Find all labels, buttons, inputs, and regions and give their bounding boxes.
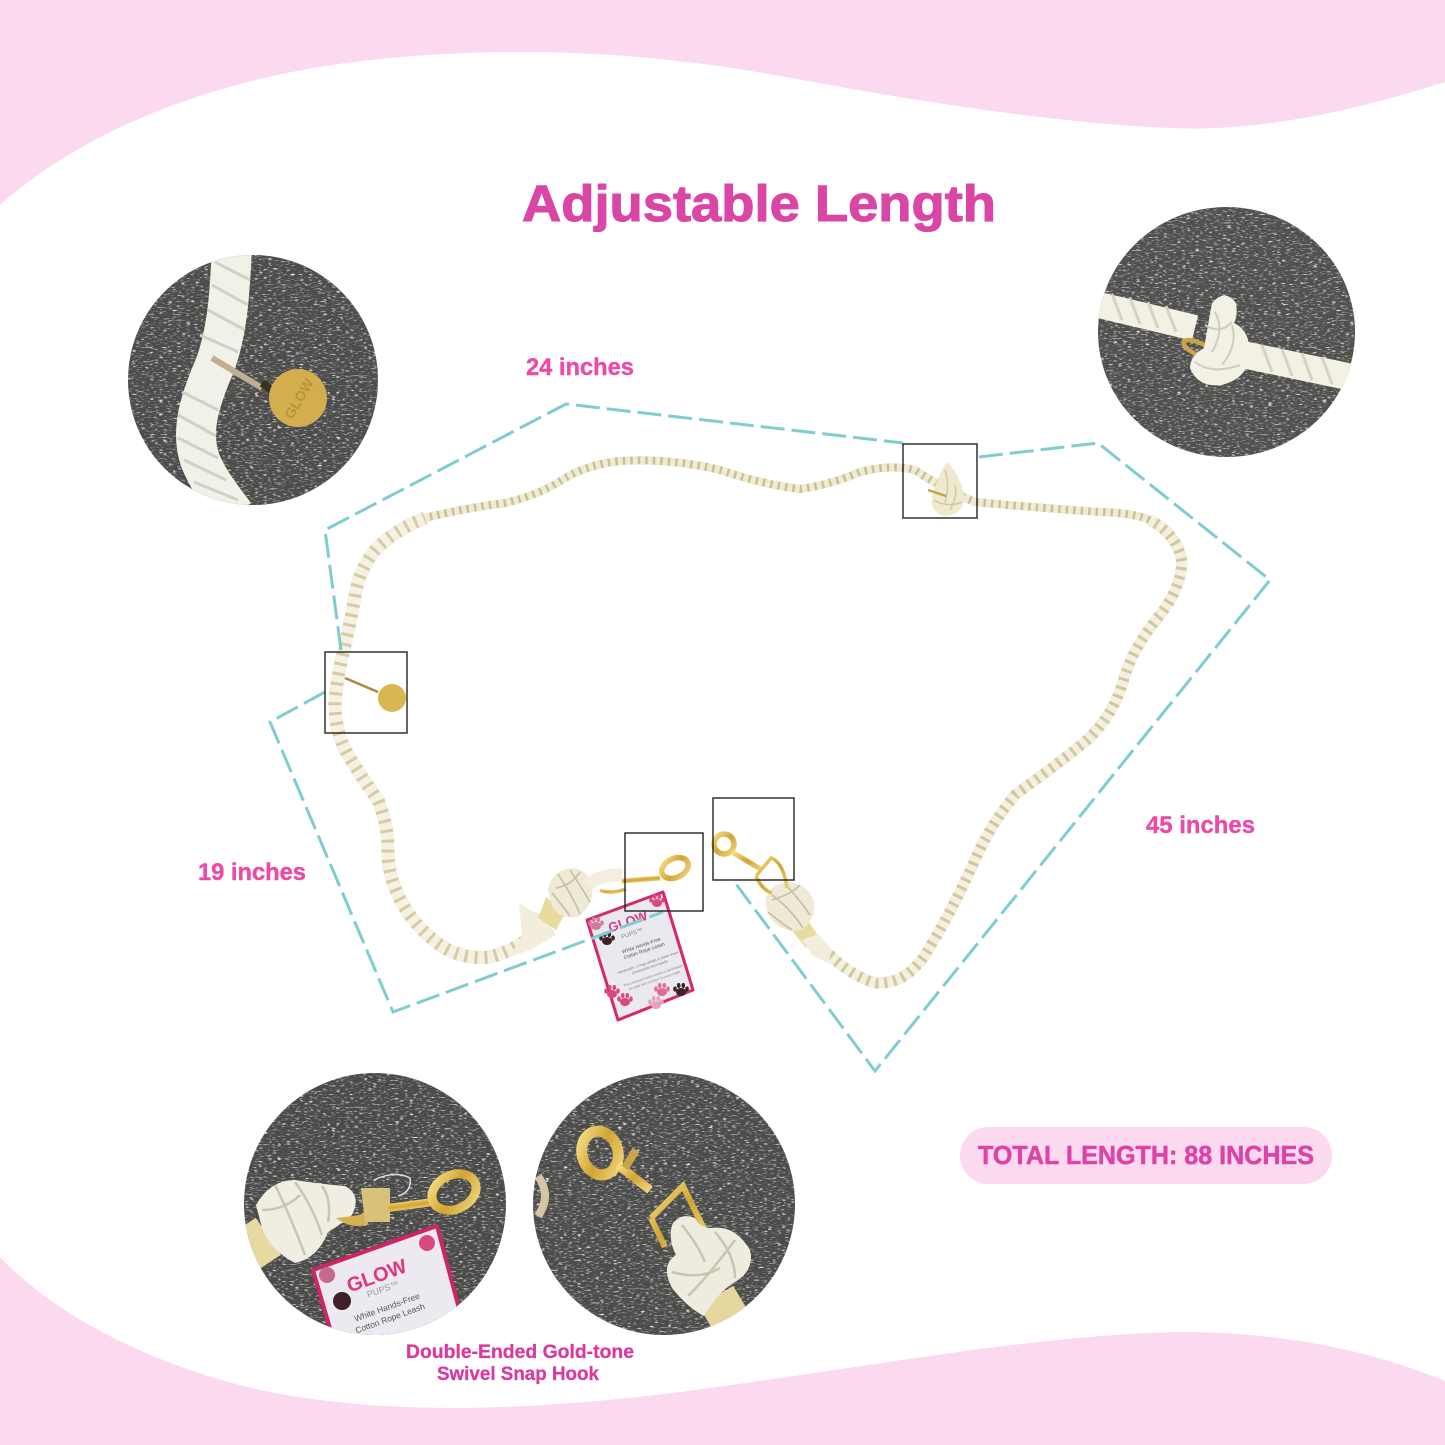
tag text: for style and comfort on every walk [628, 970, 681, 991]
tag text: This premium cotton leash is handmade [623, 964, 683, 988]
label: 19 inches: 19 inches [198, 859, 306, 886]
rope: right section [800, 520, 1182, 983]
total length pill [960, 1127, 1332, 1184]
right end knot and fringe [766, 882, 832, 963]
caption [406, 1342, 634, 1385]
leash rope [335, 460, 1182, 983]
caption: Double-Ended Gold-tone [406, 1342, 634, 1363]
label: 45 inches: 45 inches [1146, 812, 1255, 839]
total length pill: TOTAL LENGTH: 88 INCHES [978, 1140, 1314, 1170]
product hang tag [587, 892, 693, 1020]
photo: left snap hook with tag: White Hands-Free [353, 1291, 421, 1324]
detail box: left hook [625, 833, 703, 911]
tag text: GLOW [606, 908, 650, 935]
gold snap hook right [714, 834, 787, 893]
rope: top section [425, 460, 1150, 520]
left end knot and fringe [510, 868, 622, 957]
label: 24 inches: 24 inches [526, 354, 634, 381]
detail box: right hook [713, 798, 794, 880]
tag text [600, 902, 686, 993]
top pink wave [0, 0, 1445, 205]
knot on top section [928, 462, 965, 516]
dashed measure: 19 inches [270, 692, 663, 1012]
dashed measure: 24 inches [325, 404, 903, 650]
detail box: knot [903, 444, 977, 518]
rope: left section [335, 518, 530, 958]
detail box: pendant [325, 652, 407, 733]
photo: adjustment knot [1095, 204, 1359, 460]
tag text: Handmade · Fringe details & metal charm [617, 950, 680, 975]
photo: left snap hook with tag: GLOW [344, 1255, 410, 1297]
photo: left snap hook with tag: PUPS™ [366, 1279, 400, 1300]
gold snap hook left [600, 853, 692, 892]
tag paw prints [588, 894, 689, 1009]
photo: pendant on rope [125, 245, 381, 515]
photo: pendant on rope: GLOW [281, 375, 317, 421]
photo: right snap hook with knot [531, 1071, 797, 1345]
title: Adjustable Length [522, 175, 996, 232]
tag text: White Hands-Free [621, 936, 662, 955]
photo: left snap hook with tag [244, 1073, 506, 1335]
gold pendant on rope [345, 678, 406, 712]
tag text: Comfortable knot handle [631, 959, 669, 975]
tag text: Cotton Rope Leash [623, 941, 666, 961]
dashed measure: 45 inches [733, 443, 1270, 1071]
caption: Swivel Snap Hook [437, 1364, 599, 1385]
tag text: PUPS™ [620, 927, 644, 941]
bottom pink wave [0, 1257, 1445, 1445]
photo: left snap hook with tag: Cotton Rope Leash [354, 1301, 426, 1335]
